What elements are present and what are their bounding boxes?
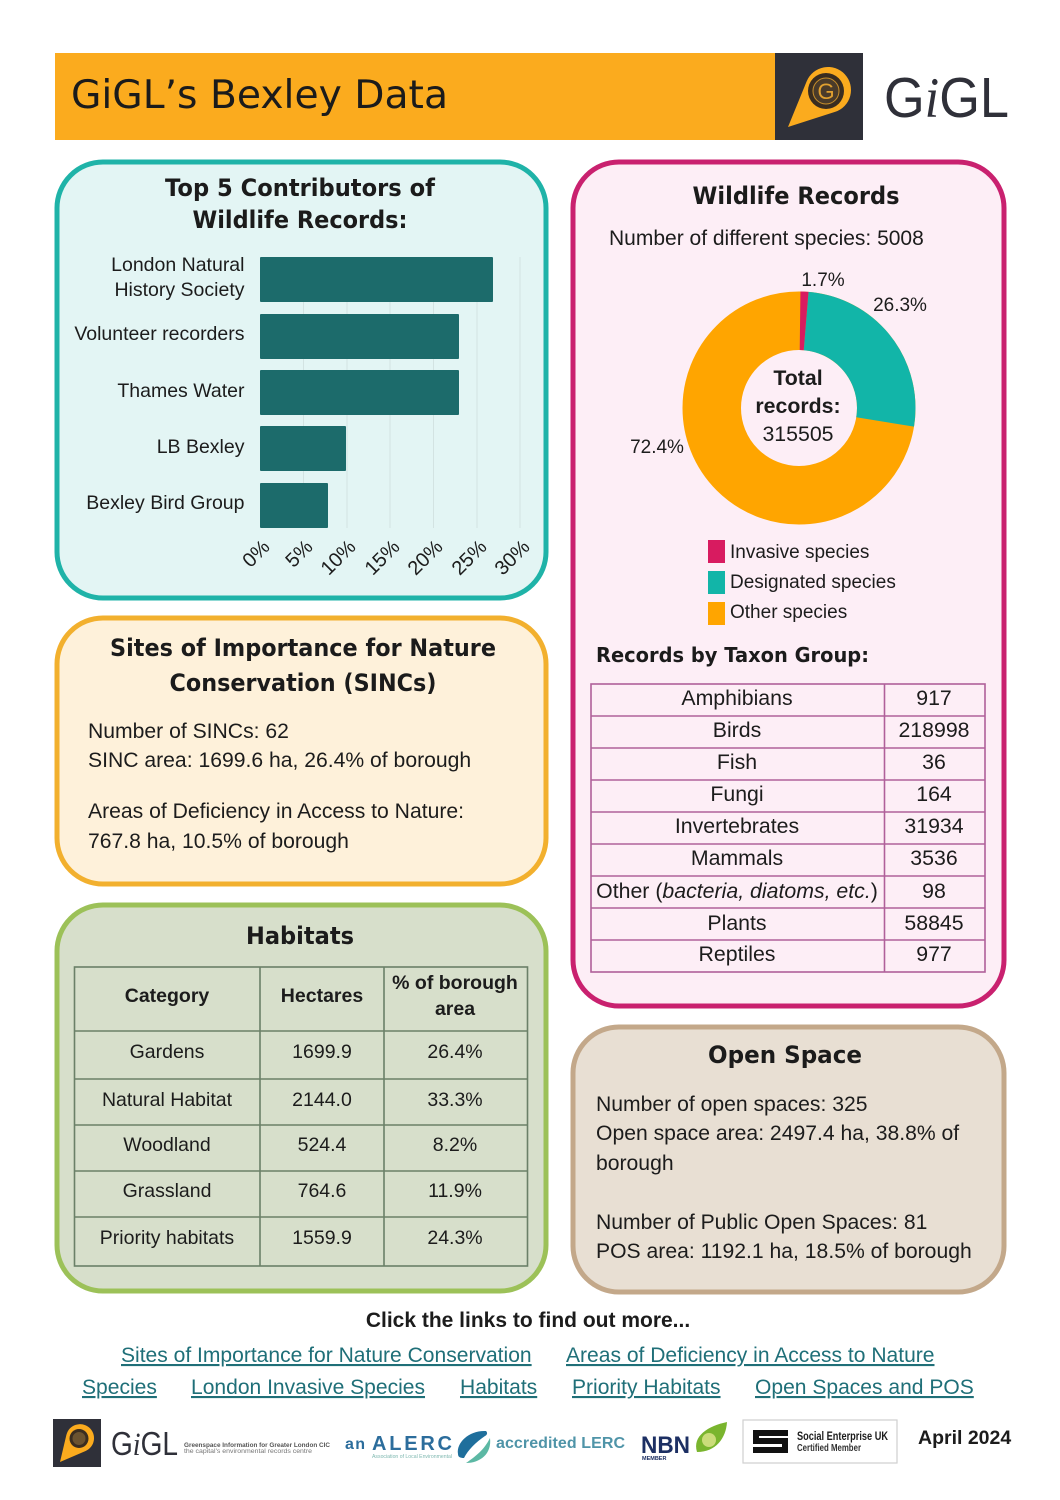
table: taxon groups: Reptiles	[699, 942, 775, 966]
header banner	[55, 53, 775, 140]
bar chart: contributors: Bexley Bird Group	[86, 492, 245, 514]
table: taxon groups: Birds	[713, 718, 761, 742]
SINC statistics: SINC area: 1699.6 ha, 26.4% of borough	[88, 749, 471, 772]
title: GiGL’s Bexley Data	[71, 73, 448, 118]
table: habitats: 2144.0	[292, 1089, 352, 1111]
bar chart: contributors: LB Bexley	[157, 436, 245, 458]
table: habitats: 33.3%	[427, 1089, 483, 1111]
icon: GiGL map pin logo	[775, 53, 863, 140]
links: London Invasive Species	[191, 1376, 425, 1399]
links: Open Spaces and POS	[755, 1376, 974, 1399]
open space statistics: borough	[596, 1152, 674, 1175]
table: habitats: 1559.9	[292, 1227, 352, 1249]
bar chart: contributors: Volunteer recorders	[74, 323, 245, 345]
footer logo: ALERC accredited LERC	[345, 1431, 625, 1463]
table: habitats: 26.4%	[427, 1041, 483, 1063]
table: taxon groups: Fungi	[710, 782, 764, 806]
footer logo: GiGL: GiGL	[111, 1425, 178, 1463]
table: taxon groups	[591, 684, 985, 972]
table: habitats: % of borough	[392, 972, 518, 994]
heading: top 5 contributors: Wildlife Records:	[192, 206, 408, 234]
footer logo: GiGL: the capital's environmental records centre	[184, 1448, 312, 1455]
SINC statistics: 767.8 ha, 10.5% of borough	[88, 830, 349, 853]
donut chart: total records: 315505	[762, 422, 834, 446]
table: taxon groups: 977	[916, 942, 952, 966]
table: taxon groups: Mammals	[691, 846, 783, 870]
panel: habitats	[57, 905, 546, 1291]
legend: species categories	[708, 540, 896, 625]
legend: species categories: Designated species	[730, 572, 896, 593]
open space statistics: Open space area: 2497.4 ha, 38.8% of	[596, 1122, 959, 1145]
table: habitats: Woodland	[123, 1134, 211, 1156]
heading: open space: Open Space	[708, 1041, 862, 1069]
table: taxon groups: 58845	[904, 911, 964, 935]
bar chart: contributors: Thames Water	[117, 380, 245, 402]
table: taxon groups: 218998	[898, 718, 970, 742]
open space statistics: POS area: 1192.1 ha, 18.5% of borough	[596, 1240, 972, 1263]
bar chart: contributors: London Natural	[111, 254, 244, 276]
links call to action: Click the links to find out more...	[366, 1309, 690, 1332]
table: habitats	[74, 967, 528, 1266]
table: habitats: 11.9%	[428, 1180, 482, 1202]
table: habitats: 764.6	[298, 1180, 346, 1202]
links: Areas of Deficiency in Access to Nature	[566, 1344, 934, 1367]
donut chart: total records: 26.3%	[873, 295, 927, 316]
links: Sites of Importance for Nature Conservation	[121, 1344, 532, 1367]
heading: records by taxon group: Records by Taxon Group:	[596, 643, 869, 667]
footer logo: ALERC accredited LERC: ALERC	[372, 1433, 452, 1455]
heading: SINCs: Sites of Importance for Nature	[110, 634, 496, 662]
footer logo: ALERC accredited LERC: accredited LERC	[496, 1435, 625, 1452]
table: taxon groups: 3536	[910, 846, 958, 870]
table: habitats: Priority habitats	[100, 1227, 234, 1249]
panel: SINCs	[57, 618, 546, 884]
panel: top 5 contributors	[57, 162, 546, 598]
table: habitats: Hectares	[281, 985, 363, 1007]
footer logo: NBN member	[641, 1422, 727, 1462]
table: taxon groups: Fish	[717, 750, 757, 774]
bar chart: contributors: 25%	[448, 536, 492, 580]
links: Habitats	[460, 1376, 537, 1399]
table: habitats: 1699.9	[292, 1041, 352, 1063]
panel: open space	[573, 1027, 1004, 1292]
legend: species categories: Invasive species	[730, 542, 869, 563]
table: habitats: 524.4	[298, 1134, 347, 1156]
table: taxon groups: Plants	[707, 911, 767, 935]
footer logo: GiGL: Greenspace Information for Greater London CIC	[184, 1442, 330, 1449]
footer logo: NBN member: MEMBER	[642, 1456, 666, 1462]
table: taxon groups: 31934	[904, 814, 964, 838]
bar chart: contributors: 0%	[239, 536, 275, 572]
open space statistics: Number of Public Open Spaces: 81	[596, 1211, 927, 1234]
footer logo: ALERC accredited LERC: Association of Local Environmental	[372, 1454, 452, 1460]
date: April 2024	[918, 1427, 1011, 1449]
open space statistics	[596, 1093, 972, 1263]
bar chart: contributors: 5%	[282, 536, 318, 572]
table: taxon groups: 36	[922, 750, 946, 774]
panel: wildlife records	[573, 162, 1004, 1006]
bar chart: contributors	[74, 254, 535, 580]
heading: wildlife records: Wildlife Records	[692, 182, 900, 210]
footer logo: GiGL	[53, 1419, 330, 1467]
footer logo: ALERC accredited LERC: an	[345, 1436, 365, 1453]
legend: species categories: Other species	[730, 602, 847, 623]
donut chart: total records: 1.7%	[801, 270, 845, 291]
bar chart: contributors: 10%	[317, 536, 361, 580]
heading: habitats: Habitats	[246, 922, 354, 950]
footer logo: NBN member: NBN	[641, 1432, 690, 1459]
heading: top 5 contributors: Top 5 Contributors of	[165, 174, 436, 202]
table: habitats: Grassland	[123, 1180, 211, 1202]
links: Priority Habitats	[572, 1376, 721, 1399]
donut chart: total records: Total	[773, 366, 823, 390]
species count: Number of different species: 5008	[609, 227, 924, 250]
table: habitats: area	[435, 998, 475, 1020]
table: taxon groups: 164	[916, 782, 952, 806]
bar chart: contributors: History Society	[114, 279, 245, 301]
footer logo: Social Enterprise UK: Social Enterprise UK	[797, 1431, 889, 1443]
table: habitats: 8.2%	[433, 1134, 477, 1156]
SINC statistics	[88, 720, 471, 853]
table: taxon groups: Other (bacteria, diatoms, etc.)	[596, 879, 878, 903]
heading: top 5 contributors	[165, 174, 436, 234]
icon: GiGL map pin logo: G	[817, 79, 835, 104]
table: taxon groups: Amphibians	[681, 686, 793, 710]
bar chart: contributors: 20%	[404, 536, 448, 580]
SINC statistics: Number of SINCs: 62	[88, 720, 289, 743]
donut chart: total records: 72.4%	[630, 437, 684, 458]
SINC statistics: Areas of Deficiency in Access to Nature:	[88, 800, 464, 823]
donut chart: total records	[630, 270, 927, 495]
table: habitats: Natural Habitat	[102, 1089, 233, 1111]
table: habitats: 24.3%	[427, 1227, 483, 1249]
footer logo: Social Enterprise UK: Certified Member	[797, 1443, 861, 1454]
bar chart: contributors: 15%	[361, 536, 405, 580]
table: habitats: Gardens	[130, 1041, 205, 1063]
GiGL wordmark: GiGL	[884, 66, 1009, 130]
donut chart: total records: records:	[755, 394, 841, 418]
table: taxon groups: 98	[922, 879, 946, 903]
open space statistics: Number of open spaces: 325	[596, 1093, 867, 1116]
table: habitats: Category	[125, 985, 209, 1007]
bar chart: contributors: 30%	[491, 536, 535, 580]
links	[82, 1344, 974, 1399]
links: Species	[82, 1376, 157, 1399]
heading: SINCs	[110, 634, 496, 697]
table: taxon groups: Invertebrates	[675, 814, 799, 838]
table: taxon groups: 917	[916, 686, 952, 710]
heading: SINCs: Conservation (SINCs)	[170, 669, 436, 697]
footer logo: Social Enterprise UK	[743, 1420, 897, 1463]
